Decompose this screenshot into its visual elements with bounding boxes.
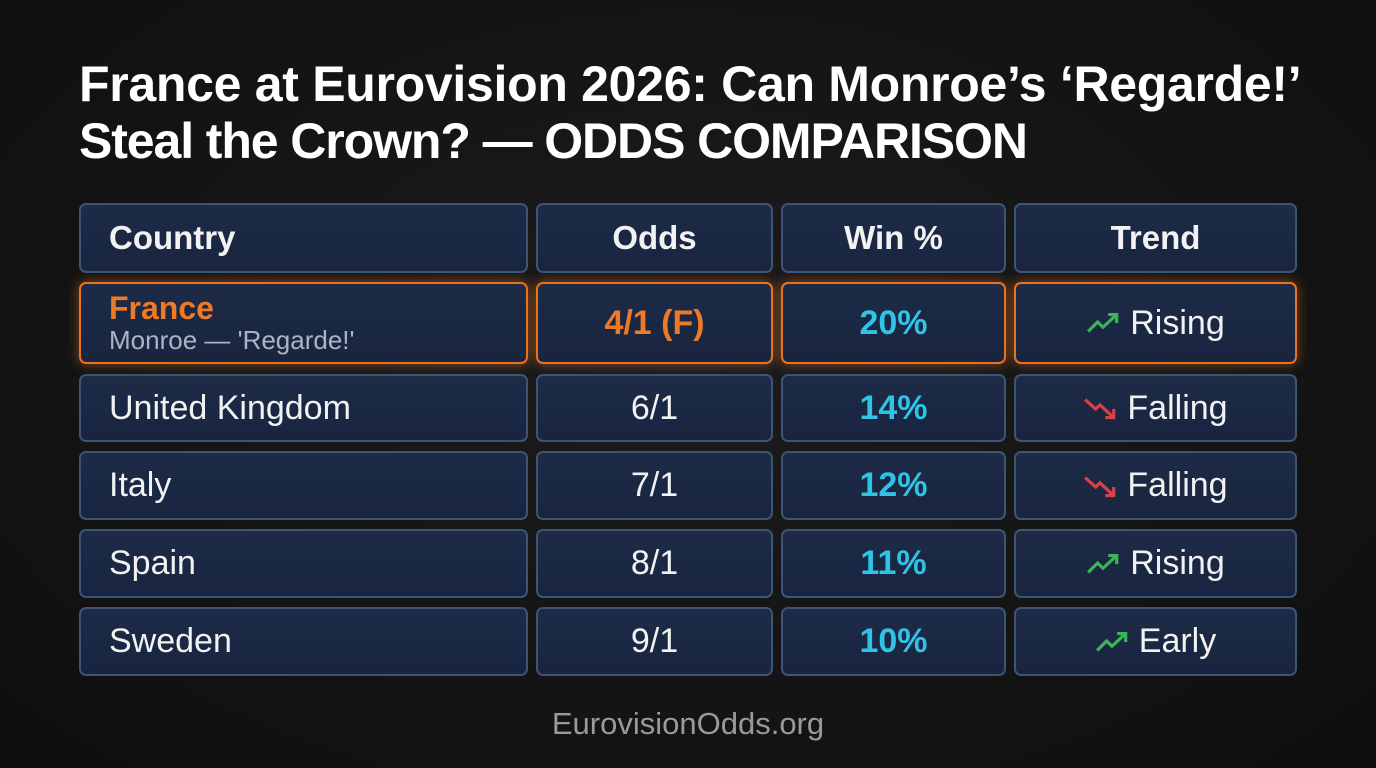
UK trend <box>1014 374 1297 442</box>
header: country: Country <box>109 219 236 256</box>
row: Spain <box>79 529 528 598</box>
header: trend <box>1014 203 1297 273</box>
row: UK: United Kingdom <box>109 388 351 426</box>
row: France <box>79 282 528 364</box>
France trend: Rising <box>1130 304 1225 342</box>
row: Italy: Italy <box>109 466 171 504</box>
row: France: France <box>109 290 214 326</box>
title <box>79 56 1301 169</box>
France win: 20% <box>859 304 928 342</box>
table: 14% <box>859 388 928 426</box>
title: Steal the Crown? — ODDS COMPARISON <box>79 113 1027 169</box>
header: odds <box>536 203 773 273</box>
title: France at Eurovision 2026: Can Monroe’s ‘Regarde!’ <box>79 56 1301 112</box>
row: France: Monroe — 'Regarde!' <box>109 324 354 354</box>
Italy trend <box>1014 451 1297 520</box>
Sweden trend: Early <box>1139 622 1216 660</box>
row: Italy <box>79 451 528 520</box>
header: win: Win % <box>844 219 943 256</box>
footer: EurovisionOdds.org <box>552 706 824 741</box>
header: odds: Odds <box>612 219 697 256</box>
table: 9/1 <box>631 622 678 660</box>
table: 7/1 <box>631 466 678 504</box>
Italy trend: Falling <box>1127 466 1228 504</box>
row: Sweden <box>79 607 528 676</box>
header: trend: Trend <box>1111 219 1200 256</box>
table: 10% <box>859 622 928 660</box>
table: 12% <box>859 466 928 504</box>
France win <box>781 282 1006 364</box>
table: 6/1 <box>631 388 678 426</box>
Sweden trend <box>1014 607 1297 676</box>
France odds: 4/1 (F) <box>604 304 705 342</box>
header: win <box>781 203 1006 273</box>
table: 11% <box>860 544 927 582</box>
row: Spain: Spain <box>109 544 196 582</box>
row: Sweden: Sweden <box>109 622 232 660</box>
header: country <box>79 203 528 273</box>
table: 8/1 <box>631 544 678 582</box>
row: UK <box>79 374 528 442</box>
France odds <box>536 282 773 364</box>
UK trend: Falling <box>1127 388 1228 426</box>
Spain trend <box>1014 529 1297 598</box>
France trend <box>1014 282 1297 364</box>
Spain trend: Rising <box>1130 544 1225 582</box>
